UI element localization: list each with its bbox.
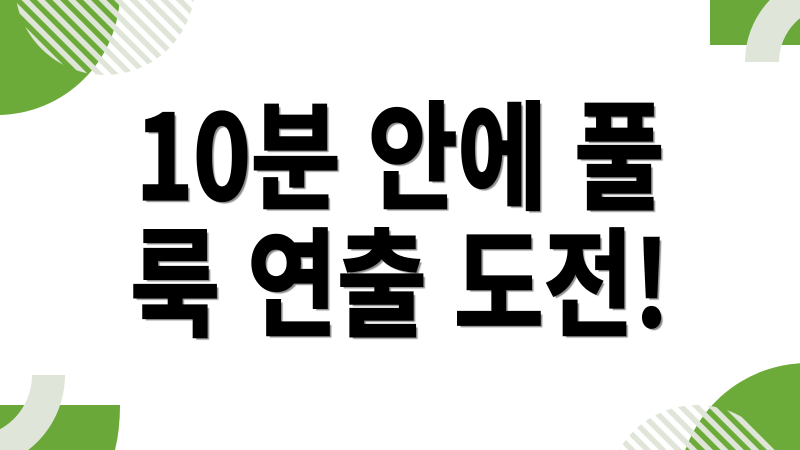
top-right green block: [710, 0, 800, 45]
bottom-right green circle: [678, 363, 800, 450]
top-left hatched circle: [15, 0, 195, 75]
title: 10분 안에 풀: [136, 64, 664, 233]
bottom-right hatched circle: [607, 405, 787, 450]
top-left green circle: [0, 0, 120, 115]
bottom-left pale arc: [0, 375, 65, 450]
title: 룩 연출 도전!: [130, 191, 670, 360]
top-right pale arc: [745, 0, 800, 62]
bottom-left green block: [0, 405, 120, 450]
